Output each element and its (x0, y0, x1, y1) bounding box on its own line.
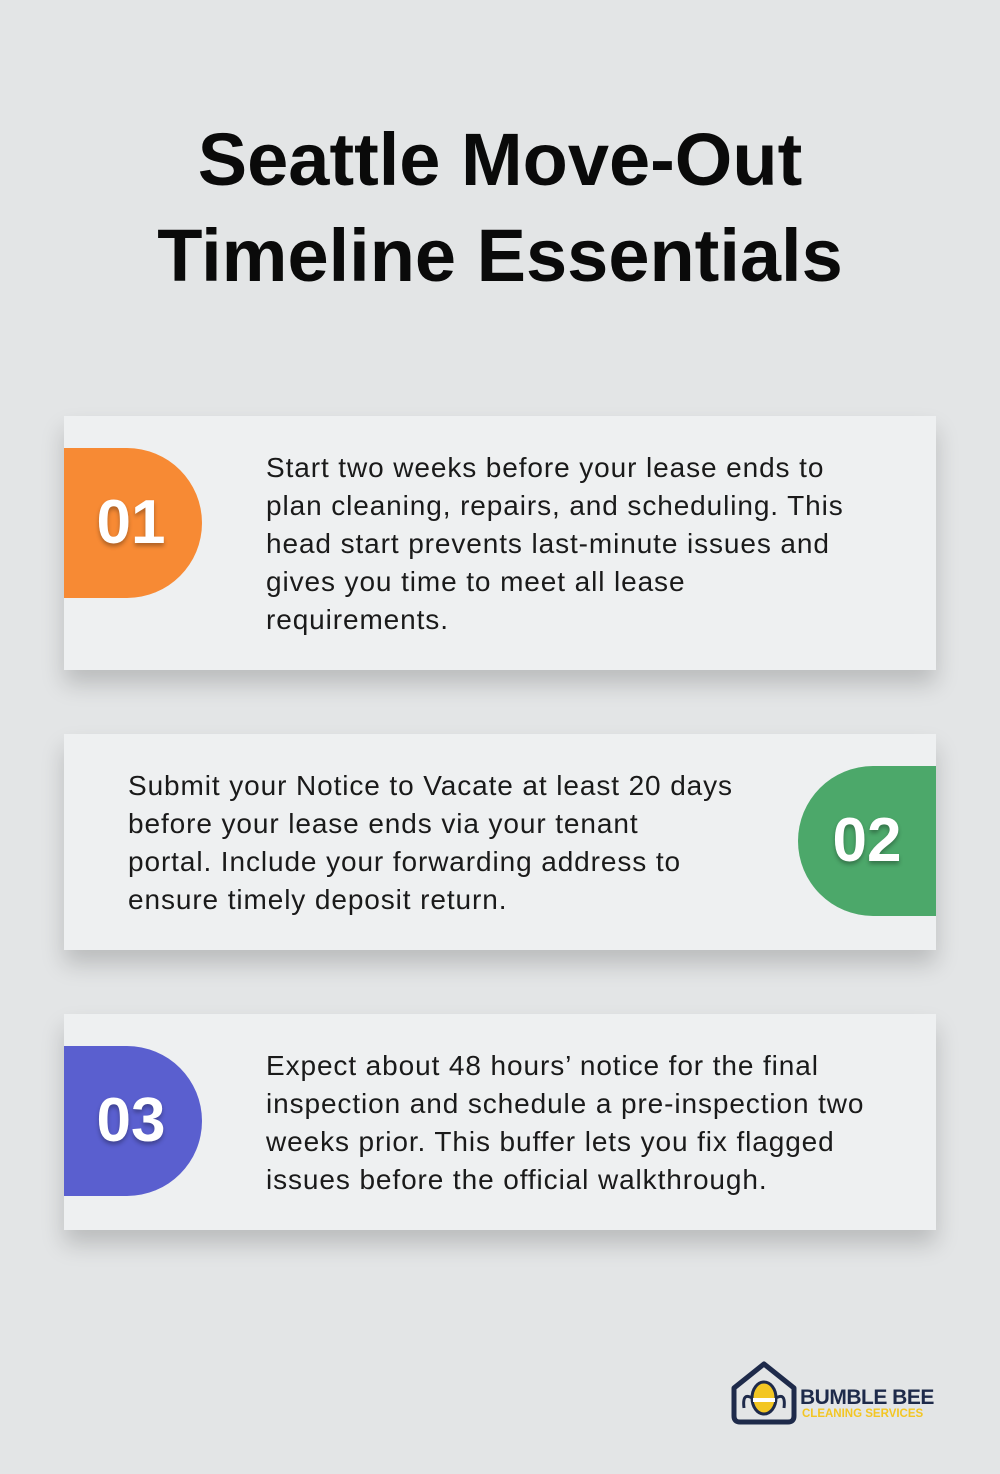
logo (732, 1361, 934, 1424)
text 01: head start prevents last-minute issues and (266, 528, 830, 559)
panel: step 03 (64, 1014, 936, 1230)
badge 02 (798, 766, 936, 916)
text 02: ensure timely deposit return. (128, 884, 507, 915)
text 01 (266, 452, 844, 635)
panel: step 01 (64, 416, 936, 670)
text 03: issues before the official walkthrough. (266, 1164, 768, 1195)
logo text: BUMBLE BEE (800, 1386, 934, 1409)
title: Timeline Essentials (157, 214, 843, 297)
badge 02: 02 (833, 806, 901, 875)
badge 01: 01 (97, 488, 165, 557)
text 03 (266, 1050, 864, 1195)
title: Seattle Move-Out (198, 118, 802, 201)
text 01: plan cleaning, repairs, and scheduling. This (266, 490, 844, 521)
badge 01 (64, 448, 202, 598)
text 02: Submit your Notice to Vacate at least 20 days (128, 770, 733, 801)
panel: step 02 (64, 734, 936, 950)
text 02: portal. Include your forwarding address to (128, 846, 681, 877)
badge 03: 03 (97, 1086, 165, 1155)
text 01: requirements. (266, 604, 449, 635)
text 01: gives you time to meet all lease (266, 566, 685, 597)
text 03: inspection and schedule a pre-inspection two (266, 1088, 864, 1119)
icon: bee house (732, 1361, 796, 1424)
text 01: Start two weeks before your lease ends to (266, 452, 824, 483)
title (157, 118, 843, 297)
text 03: weeks prior. This buffer lets you fix flagged (266, 1126, 835, 1157)
logo: CLEANING SERVICES (802, 1408, 923, 1420)
text 02: before your lease ends via your tenant (128, 808, 639, 839)
badge 03 (64, 1046, 202, 1196)
text 03: Expect about 48 hours’ notice for the final (266, 1050, 819, 1081)
text 02 (128, 770, 733, 915)
